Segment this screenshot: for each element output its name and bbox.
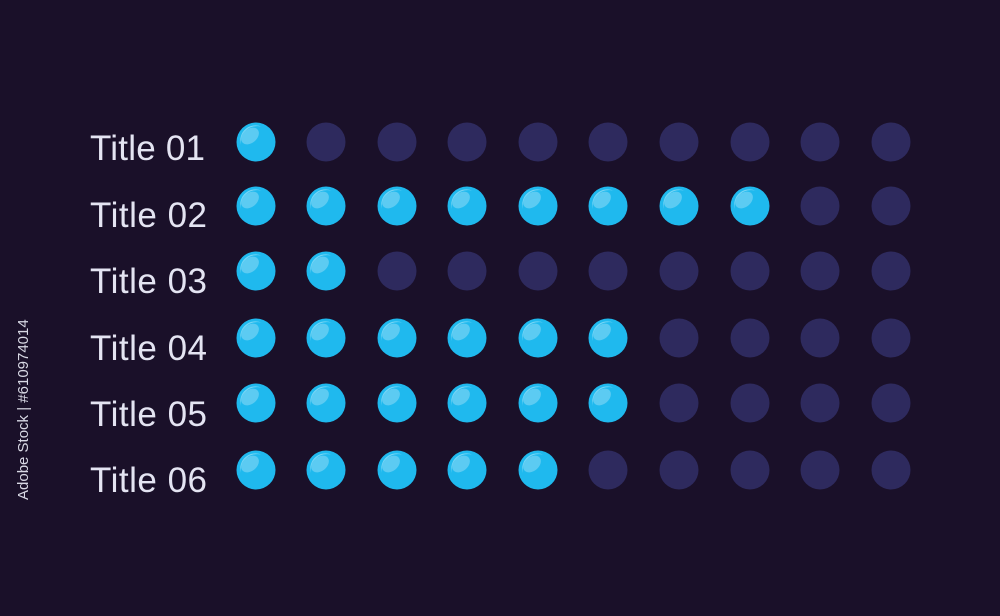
- row 2: [236, 186, 910, 226]
- row labels: Title 04: [90, 329, 207, 368]
- row labels: Title 05: [90, 395, 207, 434]
- row labels: [90, 129, 207, 500]
- side credit text: Adobe Stock | #610974014: [15, 319, 32, 500]
- row labels: Title 02: [90, 196, 207, 235]
- row 1: [236, 122, 910, 162]
- row labels: Title 01: [90, 129, 205, 168]
- row labels: Title 03: [90, 262, 207, 301]
- row 6: [236, 450, 910, 490]
- row 3: [236, 252, 910, 290]
- dot chart: [236, 122, 910, 490]
- row 4: [236, 318, 910, 358]
- row 5: [236, 384, 910, 422]
- row labels: Title 06: [90, 461, 207, 500]
